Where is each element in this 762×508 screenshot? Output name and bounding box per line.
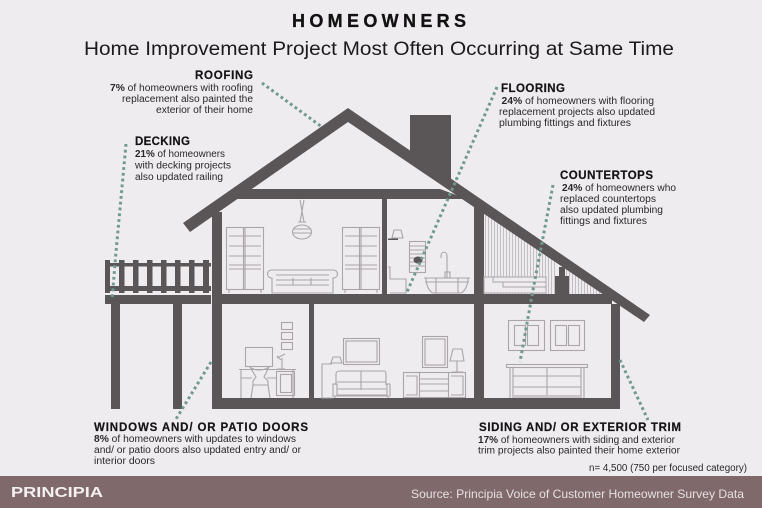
house illustration [105,108,650,409]
living room furniture [321,336,466,398]
callout: countertops: also updated plumbing [560,205,663,216]
source line: Source: Principia Voice of Customer Homeowner Survey Data [411,487,744,501]
callout: windows and patio doors: and/ or patio doors also updated entry and/ or [94,445,302,456]
callout: siding and exterior trim: 17% of homeowners with siding and exterior [478,435,676,446]
attic bed [484,277,546,293]
callout: windows and patio doors: WINDOWS AND/ OR PATIO DOORS [94,422,308,434]
brand name: PRINCIPIA [11,484,103,501]
footer band [0,476,762,508]
callout: countertops [560,170,676,227]
bedside post [555,267,569,294]
callout: roofing: replacement also painted the [122,94,253,105]
callout: roofing: 7% of homeowners with roofing [110,83,253,94]
callout: windows and patio doors [94,422,308,467]
callout: countertops: replaced countertops [560,194,656,205]
callout: siding and exterior trim: trim projects also painted their home exterior [478,446,681,456]
callout: decking: also updated railing [135,172,223,183]
dotted leader: countertops [520,185,553,362]
title: HOMEOWNERS [292,11,466,31]
upper living room furniture [226,200,380,293]
dotted leader: flooring [407,87,497,292]
callout: flooring [499,83,655,129]
callout: siding and exterior trim [478,422,681,456]
callout: roofing: exterior of their home [156,105,253,116]
dotted leader: windows [176,362,211,419]
callout: windows and patio doors: 8% of homeowners with updates to windows [94,434,296,445]
subtitle: Home Improvement Project Most Often Occurring at Same Time [84,39,674,60]
towel on rail [414,256,422,264]
right room furniture [506,320,588,398]
dotted leader: roofing [262,83,322,127]
sconce arm [388,238,398,240]
callout: windows and patio doors: interior doors [94,456,155,467]
roof and structure [183,108,650,409]
callout: decking: DECKING [135,136,190,148]
callout: countertops: 24% of homeowners who [562,183,676,194]
callout: flooring: plumbing fittings and fixtures [499,118,631,129]
bathroom fixtures [388,230,470,293]
callout: roofing [110,70,253,116]
callout: countertops: fittings and fixtures [560,216,647,227]
dotted leader: siding [620,360,648,420]
callout: flooring: FLOORING [501,83,565,95]
office furniture [239,322,296,398]
callout: countertops: COUNTERTOPS [560,170,653,182]
callout: flooring: 24% of homeowners with flooring [502,96,654,107]
callout: roofing: ROOFING [195,70,253,82]
callout: decking: 21% of homeowners [135,149,225,160]
deck [105,260,211,409]
callout: decking [134,136,231,183]
callout: flooring: replacement projects also updated [499,107,655,118]
callout: siding and exterior trim: SIDING AND/ OR EXTERIOR TRIM [479,422,681,434]
sample size note: n= 4,500 (750 per focused category) [589,463,747,474]
callout: decking: with decking projects [134,160,231,172]
dotted leader: decking [112,144,126,300]
striped attic wall [486,210,600,294]
